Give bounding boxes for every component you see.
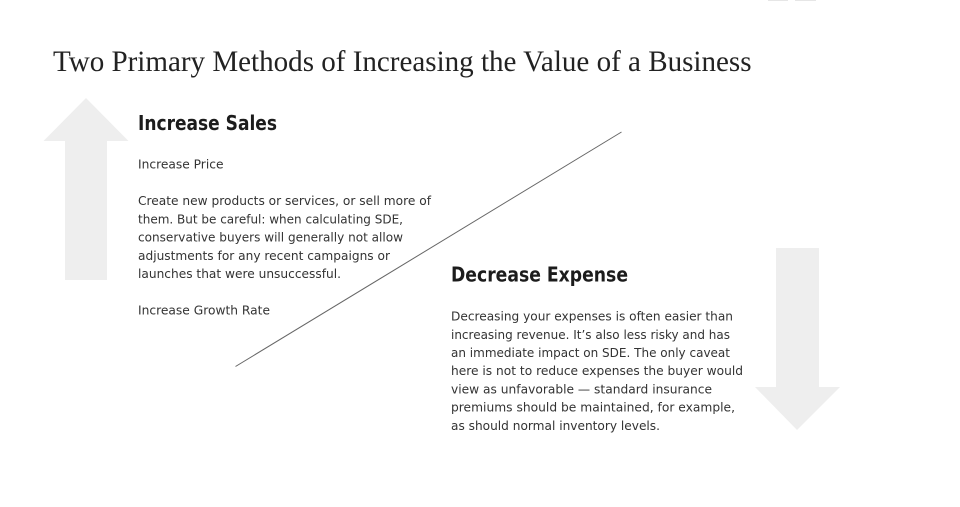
text block: decreasing expenses: as should normal inventory levels. — [451, 419, 660, 434]
text block: decreasing expenses: Decreasing your expenses is often easier than — [451, 310, 733, 325]
text block: new products: adjustments for any recent campaigns or — [138, 249, 391, 264]
text block: decreasing expenses — [451, 310, 743, 434]
text: increase growth rate: Increase Growth Rate — [138, 304, 270, 319]
text: increase price: Increase Price — [138, 158, 224, 173]
heading: decrease expense: Decrease Expense — [451, 263, 628, 287]
title: Two Primary Methods of Increasing the Value of a Business — [53, 46, 752, 78]
icon: up arrow — [44, 98, 128, 280]
text block: new products: them. But be careful: when calculating SDE, — [138, 212, 403, 227]
icon: down arrow — [755, 248, 840, 430]
diagonal divider line — [236, 132, 622, 366]
panel: increase sales — [138, 111, 431, 319]
text block: new products — [138, 194, 431, 282]
text block: decreasing expenses: premiums should be maintained, for example, — [451, 401, 735, 416]
heading: increase sales: Increase Sales — [138, 111, 277, 135]
text block: decreasing expenses: view as unfavorable — standard insurance — [451, 382, 712, 397]
text block: decreasing expenses: increasing revenue. It’s also less risky and has — [451, 328, 730, 343]
text block: decreasing expenses: here is not to reduce expenses the buyer would — [451, 364, 743, 379]
text block: decreasing expenses: an immediate impact on SDE. The only caveat — [451, 346, 730, 361]
text block: new products: Create new products or services, or sell more of — [138, 194, 431, 209]
text block: new products: conservative buyers will generally not allow — [138, 231, 403, 246]
text block: new products: launches that were unsuccessful. — [138, 267, 341, 282]
panel: decrease expense — [451, 263, 743, 434]
